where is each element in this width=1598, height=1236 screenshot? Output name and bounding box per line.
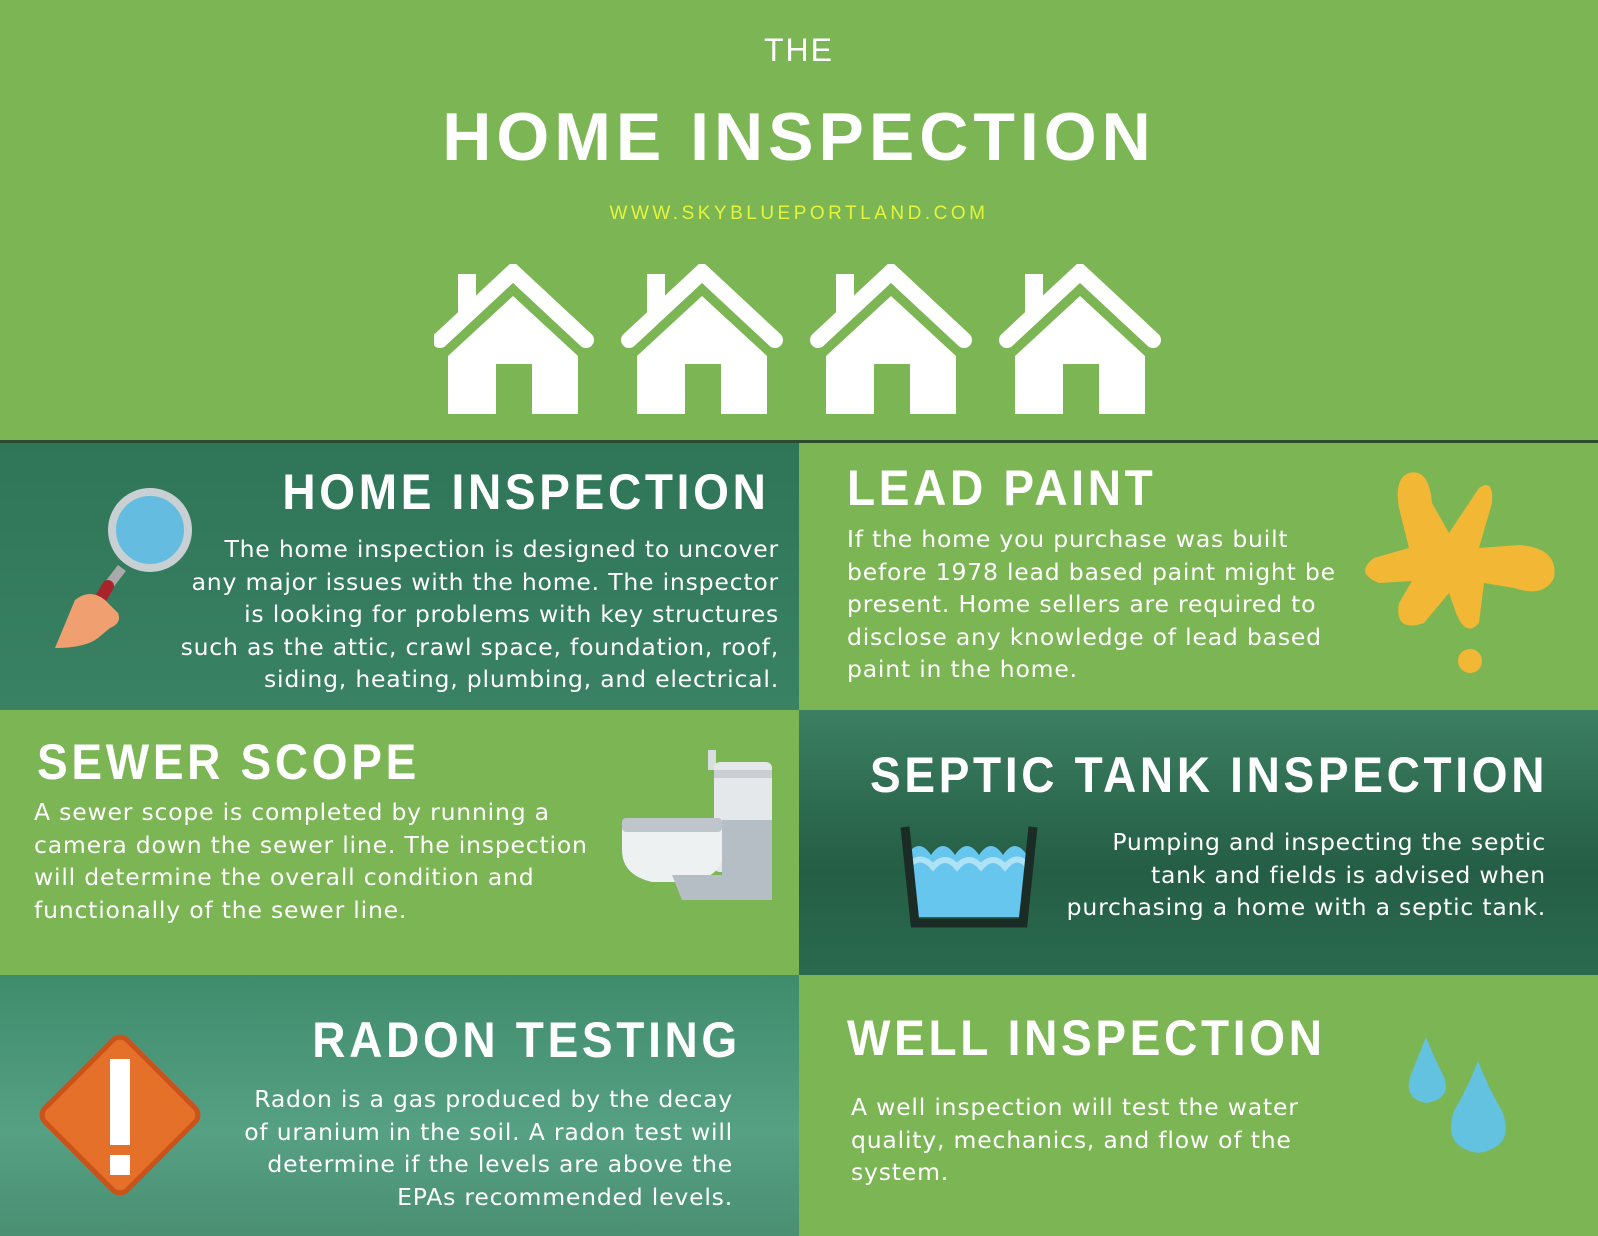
panel: lead paint (799, 443, 1598, 710)
text: tank and fields is advised when (1151, 860, 1546, 888)
heading: SEWER SCOPE (37, 734, 420, 790)
heading: SEPTIC TANK INSPECTION (870, 747, 1548, 803)
icon: toilet (622, 750, 772, 900)
panel: radon testing (0, 975, 799, 1236)
text: A sewer scope is completed by running a (34, 798, 550, 826)
text: disclose any knowledge of lead based (847, 622, 1322, 650)
pre-title: THE (764, 32, 834, 68)
text (34, 798, 588, 924)
text: camera down the sewer line. The inspection (34, 830, 588, 858)
icon: magnifier in hand (55, 488, 192, 648)
text: The home inspection is designed to uncover (224, 535, 779, 563)
text: siding, heating, plumbing, and electrical. (264, 665, 779, 693)
text: A well inspection will test the water (851, 1093, 1299, 1121)
divider (0, 440, 1598, 443)
text (847, 525, 1336, 683)
panel: home inspection (0, 443, 799, 710)
text: quality, mechanics, and flow of the (851, 1126, 1292, 1154)
icon: warning sign (40, 1034, 200, 1196)
text (851, 1093, 1299, 1186)
text (244, 1085, 733, 1210)
heading: RADON TESTING (312, 1012, 741, 1068)
icon: water tank (900, 826, 1038, 928)
text: present. Home sellers are required to (847, 590, 1316, 618)
text: system. (851, 1158, 949, 1186)
heading: LEAD PAINT (847, 460, 1156, 516)
icon: water drops (1408, 1037, 1506, 1153)
header (0, 0, 1598, 441)
text: functionally of the sewer line. (34, 896, 407, 924)
text: any major issues with the home. The inspector (192, 568, 779, 596)
text: EPAs recommended levels. (397, 1182, 733, 1210)
icons: houses (434, 264, 1161, 414)
heading: HOME INSPECTION (282, 464, 769, 520)
text: will determine the overall condition and (34, 863, 535, 891)
text (1067, 828, 1546, 921)
panel: septic tank inspection (799, 710, 1598, 975)
panel: sewer scope (0, 710, 799, 975)
text: is looking for problems with key structures (244, 600, 779, 628)
text: purchasing a home with a septic tank. (1067, 893, 1546, 921)
website url: WWW.SKYBLUEPORTLAND.COM (610, 203, 988, 224)
text (181, 535, 779, 693)
heading: WELL INSPECTION (847, 1010, 1326, 1066)
text: Pumping and inspecting the septic (1112, 828, 1546, 856)
panel: well inspection (799, 975, 1598, 1236)
text: determine if the levels are above the (267, 1150, 733, 1178)
text: paint in the home. (847, 655, 1078, 683)
icon: paint splat (1365, 472, 1555, 673)
text: before 1978 lead based paint might be (847, 558, 1336, 586)
text: such as the attic, crawl space, foundation, roof, (181, 632, 779, 660)
text: of uranium in the soil. A radon test will (244, 1118, 733, 1146)
main title: HOME INSPECTION (442, 99, 1156, 175)
text: Radon is a gas produced by the decay (254, 1085, 733, 1113)
text: If the home you purchase was built (847, 525, 1288, 553)
